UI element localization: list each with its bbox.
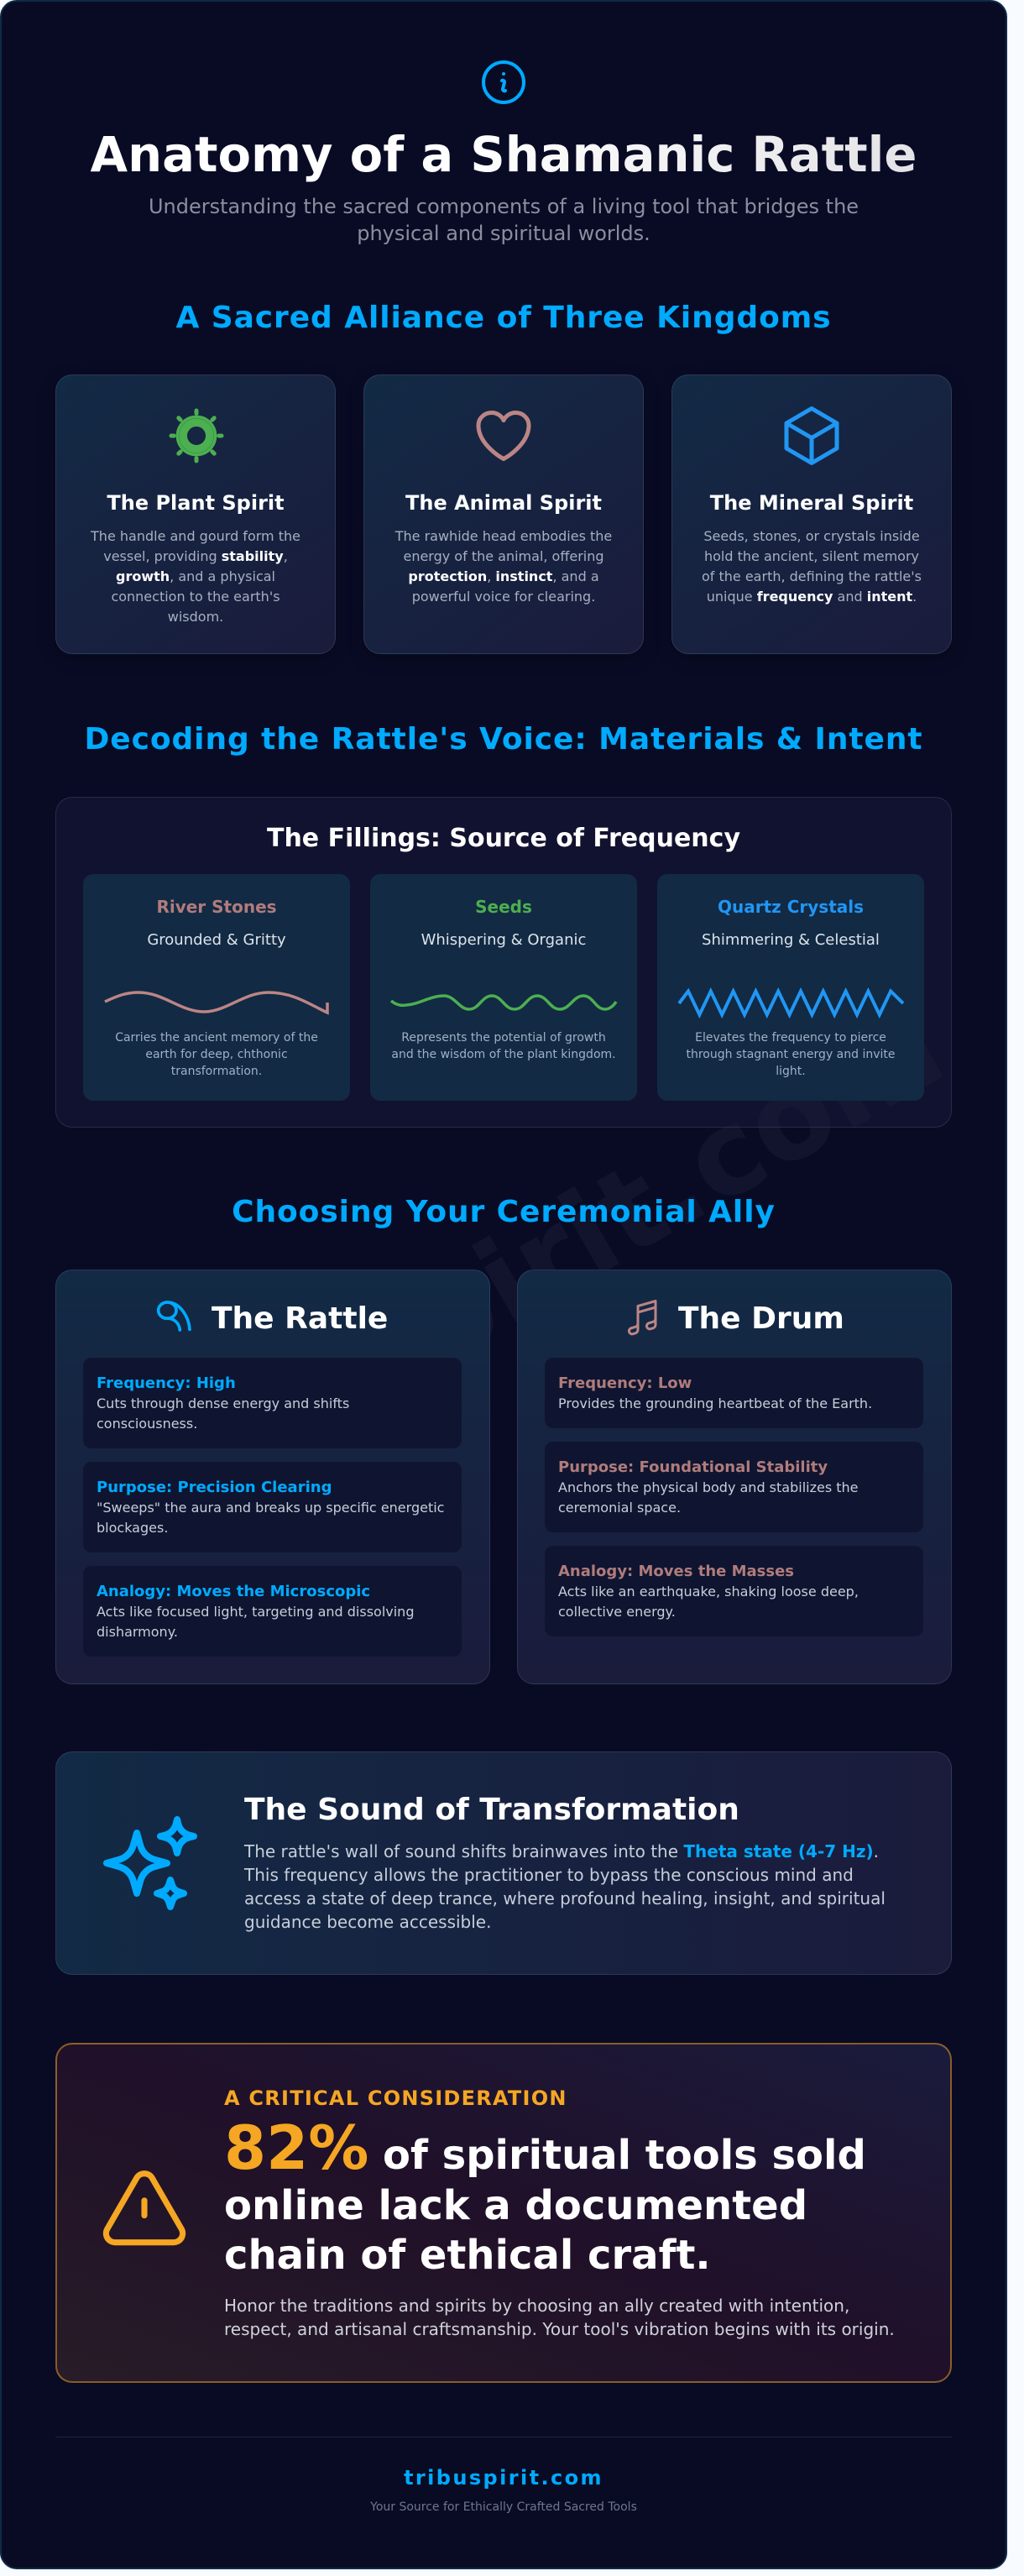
statistic xyxy=(224,2113,866,2279)
filling name: River Stones xyxy=(156,897,277,917)
subtitle xyxy=(149,195,859,245)
filling text xyxy=(115,1031,318,1078)
label: Frequency: High xyxy=(97,1374,236,1392)
card text: wisdom. xyxy=(168,609,223,625)
heading: choosing: Choosing Your Ceremonial Ally xyxy=(232,1194,776,1229)
label: Purpose: Foundational Stability xyxy=(558,1458,828,1476)
statistic: chain of ethical craft. xyxy=(224,2232,711,2279)
panel: fillings xyxy=(55,797,952,1128)
waveform: zigzag xyxy=(678,987,905,1018)
panel: critical consideration xyxy=(55,2043,952,2383)
card heading: The Plant Spirit xyxy=(107,491,285,515)
icon: cube xyxy=(784,406,839,465)
statistic: online lack a documented xyxy=(224,2181,807,2228)
card text xyxy=(394,528,612,605)
description: collective energy. xyxy=(558,1604,676,1620)
sound text: guidance become accessible. xyxy=(244,1912,491,1932)
description: Acts like focused light, targeting and dissolving xyxy=(97,1604,414,1620)
label: Analogy: Moves the Masses xyxy=(558,1563,794,1580)
icon: sparkles xyxy=(103,1816,197,1910)
description: Acts like an earthquake, shaking loose deep, xyxy=(558,1584,859,1600)
filling text: and the wisdom of the plant kingdom. xyxy=(391,1048,616,1061)
card text: connection to the earth's xyxy=(111,589,280,605)
kicker: A CRITICAL CONSIDERATION xyxy=(224,2086,567,2110)
watermark: tribuspirit.com xyxy=(41,978,965,1591)
label: Analogy: Moves the Microscopic xyxy=(97,1583,370,1600)
item: analogy xyxy=(83,1566,462,1657)
description: consciousness. xyxy=(97,1416,197,1432)
item: frequency xyxy=(545,1358,923,1428)
drum heading: The Drum xyxy=(678,1301,844,1336)
filling text: Carries the ancient memory of the xyxy=(115,1031,318,1045)
card text: The rawhide head embodies the xyxy=(395,528,612,544)
icon: sun xyxy=(170,408,223,463)
filling name: Quartz Crystals xyxy=(718,897,864,917)
icon: warning triangle xyxy=(102,2170,186,2245)
subtitle: physical and spiritual worlds. xyxy=(357,222,650,245)
card text: energy of the animal, offering xyxy=(403,548,604,564)
filling text: transformation. xyxy=(171,1065,262,1078)
filling name: Seeds xyxy=(475,897,532,917)
card text: vessel, providing stability, xyxy=(103,548,288,564)
filling card: seeds xyxy=(370,874,637,1101)
panel: sound of transformation xyxy=(55,1751,952,1975)
panel: plant spirit xyxy=(55,374,336,654)
waveform: low xyxy=(104,991,329,1015)
icon: music note xyxy=(628,1300,656,1335)
filling text xyxy=(391,1031,616,1061)
card text: unique frequency and intent. xyxy=(707,589,917,605)
icon: heart xyxy=(477,411,530,461)
description xyxy=(558,1479,859,1516)
label: Frequency: Low xyxy=(558,1374,692,1392)
statistic: 82% of spiritual tools sold xyxy=(224,2113,866,2183)
sound heading: The Sound of Transformation xyxy=(244,1793,739,1827)
panel: animal spirit xyxy=(363,374,644,654)
caution text: Honor the traditions and spirits by choosing an ally created with intention, xyxy=(224,2296,849,2316)
item: frequency xyxy=(83,1358,462,1448)
caution text: respect, and artisanal craftsmanship. Your tool's vibration begins with its origin. xyxy=(224,2319,895,2339)
card text: growth, and a physical xyxy=(116,568,275,584)
filling card: quartz crystals xyxy=(657,874,924,1101)
panel: the rattle xyxy=(55,1270,490,1684)
filling card: river stones xyxy=(83,874,350,1101)
card text: protection, instinct, and a xyxy=(408,568,599,584)
panel: the drum xyxy=(517,1270,952,1684)
card text: of the earth, defining the rattle's xyxy=(702,568,922,584)
sound text: The rattle's wall of sound shifts brainwaves into the Theta state (4-7 Hz). xyxy=(244,1841,879,1861)
filling tagline: Grounded & Gritty xyxy=(147,931,286,949)
rattle heading: The Rattle xyxy=(212,1301,388,1336)
filling tagline: Shimmering & Celestial xyxy=(702,931,880,949)
item: purpose xyxy=(83,1462,462,1552)
card text: powerful voice for clearing. xyxy=(412,589,595,605)
filling text xyxy=(686,1031,896,1078)
card text xyxy=(702,528,922,605)
description xyxy=(97,1395,349,1432)
description: Cuts through dense energy and shifts xyxy=(97,1395,349,1411)
card text: Seeds, stones, or crystals inside xyxy=(703,528,920,544)
label: Purpose: Precision Clearing xyxy=(97,1479,332,1496)
panel: mineral spirit xyxy=(671,374,952,654)
card text: The handle and gourd form the xyxy=(91,528,300,544)
sound text xyxy=(243,1841,886,1932)
tagline: Your Source for Ethically Crafted Sacred Tools xyxy=(370,2500,637,2514)
filling text: through stagnant energy and invite xyxy=(686,1048,896,1061)
description: blockages. xyxy=(97,1520,168,1536)
description xyxy=(97,1604,414,1640)
waveform: organic xyxy=(390,994,618,1011)
caution text xyxy=(224,2296,895,2339)
description xyxy=(558,1584,859,1620)
sound text: This frequency allows the practitioner to bypass the conscious mind and xyxy=(244,1865,854,1885)
description: disharmony. xyxy=(97,1624,178,1640)
icon: info xyxy=(482,60,525,104)
icon: rattle xyxy=(156,1301,191,1332)
item: analogy xyxy=(545,1546,923,1636)
filling tagline: Whispering & Organic xyxy=(421,931,586,949)
filling text: light. xyxy=(776,1065,806,1078)
filling text: earth for deep, chthonic xyxy=(145,1048,288,1061)
title: Anatomy of a Shamanic Rattle xyxy=(91,127,917,183)
description xyxy=(97,1500,444,1536)
heading: decoding: Decoding the Rattle's Voice: Materials & Intent xyxy=(84,722,923,756)
heading: three kingdoms: A Sacred Alliance of Three Kingdoms xyxy=(175,301,832,334)
card text xyxy=(91,528,300,625)
footer xyxy=(55,2437,952,2530)
filling text: Elevates the frequency to pierce xyxy=(695,1031,886,1045)
description: ceremonial space. xyxy=(558,1500,681,1516)
filling text: Represents the potential of growth xyxy=(401,1031,606,1045)
card heading: The Animal Spirit xyxy=(405,491,602,515)
description: Anchors the physical body and stabilizes the xyxy=(558,1479,859,1495)
description: Provides the grounding heartbeat of the Earth. xyxy=(558,1395,872,1411)
description: "Sweeps" the aura and breaks up specific energetic xyxy=(97,1500,444,1516)
subtitle: Understanding the sacred components of a living tool that bridges the xyxy=(149,195,859,218)
fillings heading: The Fillings: Source of Frequency xyxy=(267,824,740,853)
card heading: The Mineral Spirit xyxy=(710,491,913,515)
sound text: access a state of deep trance, where profound healing, insight, and spiritual xyxy=(244,1888,886,1908)
card text: hold the ancient, silent memory xyxy=(704,548,919,564)
item: purpose xyxy=(545,1442,923,1532)
site name: tribuspirit.com xyxy=(404,2466,603,2490)
